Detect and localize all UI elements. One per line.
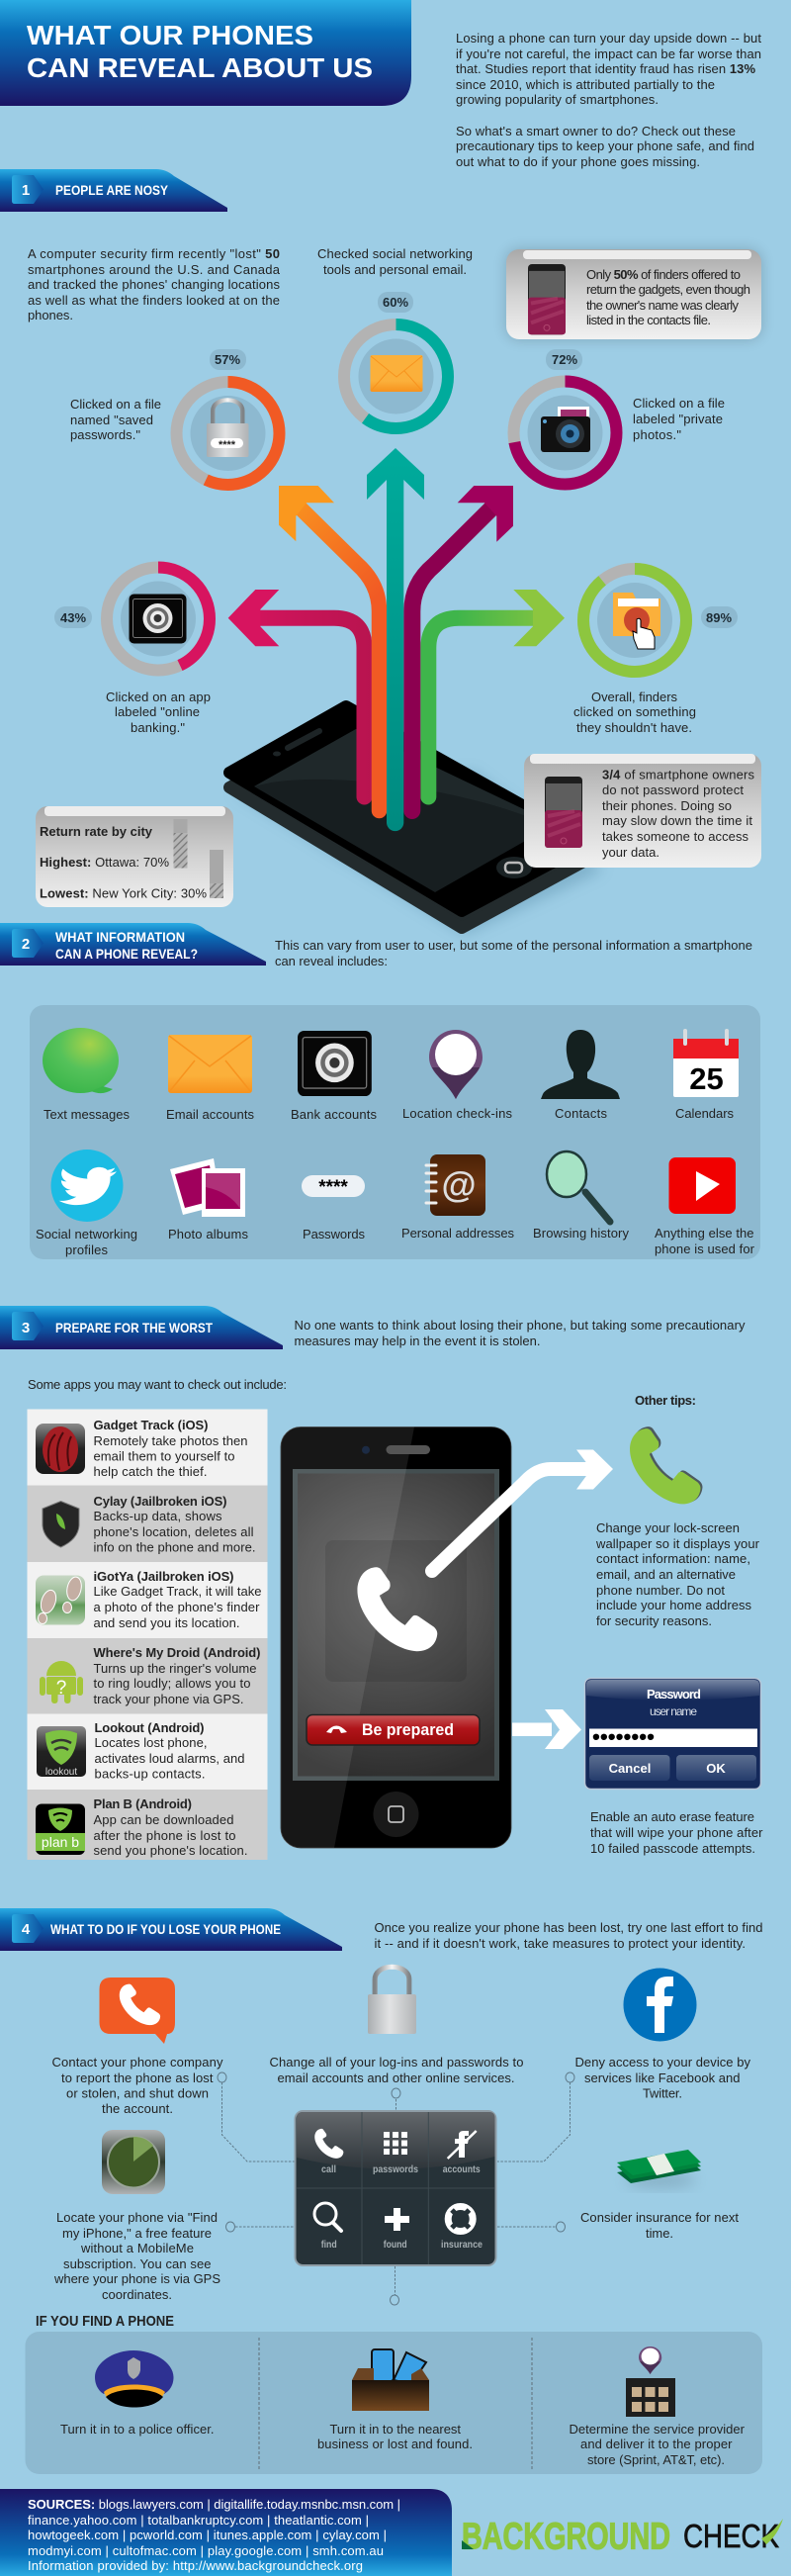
text xyxy=(317,2422,473,2451)
home button xyxy=(374,1792,419,1837)
app: Where's My Droid: ? xyxy=(56,1678,66,1699)
title: CAN REVEAL ABOUT US xyxy=(27,52,373,83)
key: call: call xyxy=(321,2163,336,2175)
donut: 57 percent passwords: 57% xyxy=(215,352,240,367)
intro text: since 2010, which is attributed partially to the xyxy=(456,77,715,92)
label: profiles xyxy=(65,1242,109,1257)
text xyxy=(570,2422,746,2467)
callout: three quarters no password xyxy=(524,754,761,868)
text: section 4 intro: it -- and if it doesn't work, take measures to protect your identity. xyxy=(374,1936,746,1951)
icon: video player xyxy=(668,1157,736,1214)
arrow: teal up xyxy=(367,448,424,831)
icon: white handset xyxy=(357,1567,437,1651)
key: passwords: passwords xyxy=(373,2163,418,2175)
text: contact company xyxy=(51,2055,223,2116)
text: change passwords: email accounts and other online services. xyxy=(277,2070,514,2085)
label: Calendars xyxy=(675,1106,734,1121)
text: locate phone: my iPhone," a free feature xyxy=(62,2226,212,2241)
app: Lookout: Locates lost phone, xyxy=(95,1735,208,1750)
app: Cylay: phone's location, deletes all xyxy=(93,1524,254,1539)
app: Cylay: Backs-up data, shows xyxy=(93,1509,222,1523)
key: find xyxy=(314,2203,341,2251)
app: Lookout: Lookout (Android) xyxy=(95,1720,204,1735)
text: lock screen tip: Change your lock-screen xyxy=(596,1520,740,1535)
label: Location check-ins xyxy=(402,1106,512,1121)
icon: orange call bubble xyxy=(99,1978,175,2044)
callout: return rate by city: Return rate by city xyxy=(40,824,153,839)
app: iGotYa: a photo of the phone's finder xyxy=(93,1600,260,1614)
text: contact company: to report the phone as lost xyxy=(61,2070,214,2085)
key: accounts xyxy=(443,2131,481,2175)
app: Cylay: Cylay (Jailbroken iOS) xyxy=(93,1494,227,1509)
text: lock screen tip: for security reasons. xyxy=(596,1613,712,1628)
intro text: So what's a smart owner to do? Check out these xyxy=(456,124,736,138)
text: social networking: Checked social networking xyxy=(317,246,473,261)
panel: what a phone can reveal xyxy=(30,1005,760,1259)
label xyxy=(36,1227,137,1257)
label: overall: they shouldn't have. xyxy=(576,720,692,735)
text: locate phone: subscription. You can see xyxy=(63,2256,212,2271)
text: experiment intro: A computer security firm recently "lost" 50 xyxy=(28,246,280,261)
text: locate phone: coordinates. xyxy=(102,2287,172,2302)
key: find: find xyxy=(321,2239,337,2251)
callout: 50 percent returned: the owner's name was clearly xyxy=(586,298,740,313)
app: Lookout xyxy=(37,1720,245,1781)
text: experiment intro: phones. xyxy=(28,308,73,322)
label: online banking: Clicked on an app xyxy=(106,690,211,704)
label: Photo albums xyxy=(168,1227,249,1242)
panel: password dialog: user name xyxy=(650,1704,697,1718)
text: apps intro: Some apps you may want to check out include: xyxy=(28,1377,287,1392)
bar chart: Ottawa 70 percent xyxy=(174,819,188,869)
app: iGotYa: and send you its location. xyxy=(93,1615,239,1630)
section banner 1 xyxy=(0,169,227,212)
icon: twitter xyxy=(51,1150,123,1222)
arrow: orange up-left xyxy=(279,486,380,811)
label: saved passwords: passwords." xyxy=(70,427,140,442)
callout: three quarters no password: their phones. Doing so xyxy=(602,798,732,813)
text: store (Sprint, AT&T, etc). xyxy=(587,2452,725,2467)
text: Determine the service provider xyxy=(570,2422,746,2437)
text: change passwords: Change all of your log-ins and passwords to xyxy=(269,2055,524,2070)
icon: radar xyxy=(102,2130,165,2194)
text: contact company: or stolen, and shut down xyxy=(66,2085,209,2101)
callout: 50 percent returned: Only 50% of finders offered to xyxy=(586,267,741,282)
icon: camera xyxy=(541,407,590,452)
panel: password dialog xyxy=(585,1678,761,1789)
label: saved passwords xyxy=(70,397,161,442)
icon: address book xyxy=(426,1154,485,1216)
text: locate phone: Locate your phone via "Find xyxy=(56,2210,218,2225)
panel: password dialog: Cancel xyxy=(609,1761,651,1776)
app: Cylay xyxy=(43,1494,255,1555)
text: section 2 intro: can reveal includes: xyxy=(275,954,388,968)
callout: three quarters no password: do not password protect xyxy=(602,782,744,797)
text: insurance xyxy=(580,2210,739,2241)
panel: if you find a phone xyxy=(26,2332,762,2474)
callout: 50 percent returned: listed in the contacts file. xyxy=(586,313,711,327)
text: experiment intro: and tracked the phones' changing locations xyxy=(28,277,281,292)
app: Plan B: Plan B (Android) xyxy=(93,1796,192,1811)
icon: classified folder with cursor xyxy=(613,593,660,649)
callout: three quarters no password: your data. xyxy=(602,845,659,860)
key: insurance xyxy=(441,2206,483,2251)
label: Anything else the xyxy=(655,1226,753,1241)
text: insurance: Consider insurance for next xyxy=(580,2210,739,2225)
key: passwords xyxy=(373,2132,418,2175)
text: social networking xyxy=(317,246,473,277)
icon: police cap xyxy=(95,2350,174,2408)
bar chart: New York 30 percent xyxy=(210,850,223,898)
footer: sources: finance.yahoo.com | totalbankruptcy.com | theatlantic.com | xyxy=(28,2513,369,2528)
intro text: growing popularity of smartphones. xyxy=(456,92,659,107)
label: online banking: labeled "online xyxy=(115,704,200,719)
text: section 4 intro: Once you realize your phone has been lost, try one last effort to find xyxy=(374,1920,763,1935)
callout: 50 percent returned: return the gadgets, even though xyxy=(586,282,750,297)
icon: padlock: **** xyxy=(219,439,236,451)
icon: store with pin xyxy=(626,2346,675,2417)
app: Plan B: after the phone is lost to xyxy=(93,1828,235,1843)
label: private photos: photos." xyxy=(633,427,681,442)
text: locate phone: without a MobileMe xyxy=(80,2241,194,2255)
donut: 43 percent banking: 43% xyxy=(60,610,86,625)
text: auto erase tip: that will wipe your phone after xyxy=(590,1825,763,1840)
label: Contacts xyxy=(555,1106,607,1121)
label: Social networking xyxy=(36,1227,137,1242)
icon: calendar xyxy=(673,1029,739,1097)
app: Gadget Track: Gadget Track (iOS) xyxy=(93,1418,208,1432)
callout: return rate by city xyxy=(36,806,233,907)
text: section 2 intro: This can vary from user to user, but some of the personal information a smartphone xyxy=(275,938,752,953)
text: experiment intro: as well as what the finders looked at on the xyxy=(28,293,280,308)
app: Where's My Droid: to ring loudly; allows you to xyxy=(93,1676,251,1691)
callout: three quarters no password: may slow down the time it xyxy=(602,813,752,828)
donut: 72 percent photos: 72% xyxy=(552,352,577,367)
app: Where's My Droid: track your phone via GPS. xyxy=(93,1692,243,1706)
app: Gadget Track: help catch the thief. xyxy=(93,1464,208,1479)
section banner 2: 2 xyxy=(22,936,30,953)
app: iGotYa: iGotYa (Jailbroken iOS) xyxy=(93,1569,233,1584)
text: lock screen tip: contact information: name, xyxy=(596,1551,750,1566)
text: auto erase tip xyxy=(590,1809,763,1856)
text: deny access xyxy=(575,2055,751,2101)
app: Cylay: info on the phone and more. xyxy=(93,1539,255,1555)
section banner 2: WHAT INFORMATION xyxy=(55,929,185,945)
icon: location pin xyxy=(429,1030,483,1099)
label: online banking xyxy=(106,690,211,735)
header: title banner xyxy=(0,0,411,106)
icon: calendar: 25 xyxy=(689,1061,724,1096)
icon: safe xyxy=(129,594,186,643)
text: contact company: the account. xyxy=(102,2101,173,2116)
app: Plan B: plan b xyxy=(42,1834,79,1850)
footer: sources: modmyi.com | cultofmac.com | play.google.com | smh.com.au xyxy=(28,2543,384,2558)
label: saved passwords: Clicked on a file xyxy=(70,397,161,412)
label: Text messages xyxy=(44,1107,131,1122)
section banner 1: PEOPLE ARE NOSY xyxy=(55,182,169,198)
section banner 2: CAN A PHONE REVEAL? xyxy=(55,946,198,962)
section banner 4: 4 xyxy=(22,1921,31,1938)
section banner 3 xyxy=(0,1306,283,1349)
intro text: that. Studies report that identity fraud has risen 13% xyxy=(456,61,755,76)
illustration: big phone xyxy=(281,1426,511,1848)
label: Personal addresses xyxy=(401,1226,514,1241)
title: WHAT OUR PHONES xyxy=(27,20,313,50)
heading: if you find a phone: IF YOU FIND A PHONE xyxy=(36,2313,174,2330)
label: private photos: Clicked on a file xyxy=(633,396,725,411)
label: Email accounts xyxy=(166,1107,255,1122)
connectors xyxy=(218,2072,574,2305)
key: insurance: insurance xyxy=(441,2239,483,2251)
button: be prepared xyxy=(307,1715,480,1745)
intro text: out what to do if your phone goes missing. xyxy=(456,154,700,169)
logo: background check: BACKGROUND xyxy=(462,2517,670,2558)
donut: 89 percent overall xyxy=(583,569,738,672)
text: locate phone: where your phone is via GPS xyxy=(53,2271,220,2286)
app: Where's My Droid xyxy=(40,1645,261,1706)
icon: green handset xyxy=(630,1426,702,1504)
icon: contact silhouette xyxy=(541,1030,620,1099)
app: Where's My Droid: Turns up the ringer's volume xyxy=(93,1661,257,1676)
text: Turn it in to a police officer. xyxy=(60,2422,214,2437)
section banner 3: 3 xyxy=(22,1320,30,1336)
icon: money xyxy=(617,2150,701,2188)
icon: padlock xyxy=(368,1967,416,2034)
text: experiment intro xyxy=(28,246,281,322)
key: found xyxy=(384,2208,409,2251)
footer: sources: Information provided by: http://www.backgroundcheck.org xyxy=(28,2558,363,2573)
donut: 60 percent email: 60% xyxy=(383,295,408,310)
icon: magnifying glass xyxy=(547,1151,610,1222)
heading: other tips: Other tips: xyxy=(635,1393,696,1408)
section banner 4: WHAT TO DO IF YOU LOSE YOUR PHONE xyxy=(50,1921,281,1937)
donut: 89 percent overall: 89% xyxy=(706,610,732,625)
section banner 4 xyxy=(0,1908,342,1951)
app: Gadget Track: email them to yourself to xyxy=(93,1448,235,1464)
panel: password dialog: •••••••• xyxy=(592,1724,655,1749)
text: deny access: Deny access to your device by xyxy=(575,2055,751,2070)
text: lock screen tip: email, and an alternative xyxy=(596,1567,736,1582)
text: auto erase tip: Enable an auto erase feature xyxy=(590,1809,754,1824)
title xyxy=(27,20,373,83)
label: online banking: banking." xyxy=(131,720,185,735)
key: accounts: accounts xyxy=(443,2163,481,2175)
illustration: smartphone xyxy=(229,706,603,935)
donut: 57 percent passwords xyxy=(176,349,279,485)
app: iGotYa: Like Gadget Track, it will take xyxy=(93,1584,261,1599)
app: Gadget Track xyxy=(36,1418,247,1479)
text: lock screen tip: include your home address xyxy=(596,1598,751,1612)
donut: 60 percent email xyxy=(344,292,448,428)
label: overall xyxy=(573,690,696,735)
text: business or lost and found. xyxy=(317,2437,473,2451)
text: Turn it in to the nearest xyxy=(330,2422,461,2437)
text: section 3 intro: measures may help in the event it is stolen. xyxy=(295,1334,540,1348)
text: change passwords xyxy=(269,2055,524,2085)
text: section 4 intro xyxy=(374,1920,763,1951)
arrow: green right xyxy=(428,590,565,797)
text: lock screen tip: wallpaper so it displays your xyxy=(595,1536,760,1551)
label: Browsing history xyxy=(533,1226,629,1241)
label: private photos: labeled "private xyxy=(633,412,723,426)
app: Plan B xyxy=(36,1796,247,1858)
app: Lookout: lookout xyxy=(45,1767,77,1778)
footer: sources: SOURCES: blogs.lawyers.com | digitallife.today.msnbc.msn.com | xyxy=(28,2497,400,2512)
icon: facebook xyxy=(623,1969,696,2042)
key: call xyxy=(314,2129,343,2175)
panel: action keypad xyxy=(295,2111,496,2265)
donut: 43 percent banking xyxy=(54,568,210,671)
icon: password field xyxy=(302,1175,365,1198)
section banner 3: PREPARE FOR THE WORST xyxy=(55,1320,213,1335)
intro text xyxy=(456,31,761,169)
app: Gadget Track: Remotely take photos then xyxy=(93,1433,247,1448)
text: deny access: services like Facebook and xyxy=(584,2070,740,2085)
app: Plan B: App can be downloaded xyxy=(93,1812,233,1827)
donut: 72 percent photos xyxy=(514,349,617,485)
key: found: found xyxy=(384,2239,407,2251)
icon: password field: **** xyxy=(318,1177,348,1198)
footer: sources xyxy=(0,2489,452,2576)
text: experiment intro: smartphones around the U.S. and Canada xyxy=(28,262,281,277)
text: deny access: Twitter. xyxy=(643,2085,682,2101)
text: lock screen tip: phone number. Do not xyxy=(596,1583,725,1598)
label: Bank accounts xyxy=(291,1107,378,1122)
text: contact company: Contact your phone company xyxy=(51,2055,223,2070)
intro text: if you're not careful, the impact can be far worse than xyxy=(456,46,761,61)
text: locate phone xyxy=(53,2210,220,2302)
intro text: precautionary tips to keep your phone safe, and find xyxy=(456,138,754,153)
callout: 50 percent returned xyxy=(506,249,761,339)
app: Lookout: activates loud alarms, and xyxy=(95,1751,245,1766)
text: section 3 intro xyxy=(295,1318,746,1348)
footer: sources: howtogeek.com | pcworld.com | itunes.apple.com | cylay.com | xyxy=(28,2528,387,2542)
icon: photo albums xyxy=(170,1158,245,1217)
icon: address book: @ xyxy=(441,1164,477,1205)
app: Lookout: backs-up contacts. xyxy=(95,1767,206,1781)
text: section 2 intro xyxy=(275,938,752,968)
label: overall: Overall, finders xyxy=(591,690,678,704)
label: private photos xyxy=(633,396,725,442)
icon: bank safe xyxy=(298,1031,372,1096)
icon: lost and found box xyxy=(352,2349,429,2411)
app: Plan B: send you phone's location. xyxy=(93,1843,247,1858)
text: lock screen tip xyxy=(595,1520,760,1628)
panel: apps list xyxy=(28,1409,267,1860)
label: Passwords xyxy=(303,1227,366,1242)
app: Where's My Droid: Where's My Droid (Android) xyxy=(93,1645,261,1660)
section banner 1: 1 xyxy=(22,182,30,199)
callout: return rate by city: Highest: Ottawa: 70% xyxy=(40,855,169,870)
text: social networking: tools and personal email. xyxy=(323,262,467,277)
callout: three quarters no password: takes someone to access xyxy=(602,829,749,844)
arrow: to lock-screen tip xyxy=(432,1450,613,1571)
icon: email xyxy=(168,1035,252,1093)
panel: password dialog: OK xyxy=(706,1761,726,1776)
label xyxy=(655,1226,755,1256)
panel: password dialog: Password xyxy=(647,1687,701,1702)
section banner 2 xyxy=(0,923,266,966)
icon: envelope xyxy=(370,355,423,392)
intro text: Losing a phone can turn your day upside down -- but xyxy=(456,31,761,46)
text: and deliver it to the proper xyxy=(580,2437,733,2451)
icon: text messages xyxy=(43,1028,119,1093)
arrow: to password tip xyxy=(512,1709,581,1749)
label: phone is used for xyxy=(655,1242,755,1256)
label: saved passwords: named "saved xyxy=(70,413,153,427)
label: overall: clicked on something xyxy=(573,704,696,719)
arrow: pink left xyxy=(228,590,364,797)
callout: return rate by city: Lowest: New York City: 30% xyxy=(40,886,207,900)
button: be prepared: Be prepared xyxy=(362,1720,454,1739)
text: insurance: time. xyxy=(646,2226,673,2241)
text: section 3 intro: No one wants to think about losing their phone, but taking some precautionary xyxy=(295,1318,746,1333)
app: iGotYa xyxy=(36,1569,261,1630)
text: auto erase tip: 10 failed passcode attempts. xyxy=(590,1841,755,1856)
arrow: purple up-right xyxy=(412,486,513,811)
callout: three quarters no password: 3/4 of smartphone owners xyxy=(602,768,755,782)
